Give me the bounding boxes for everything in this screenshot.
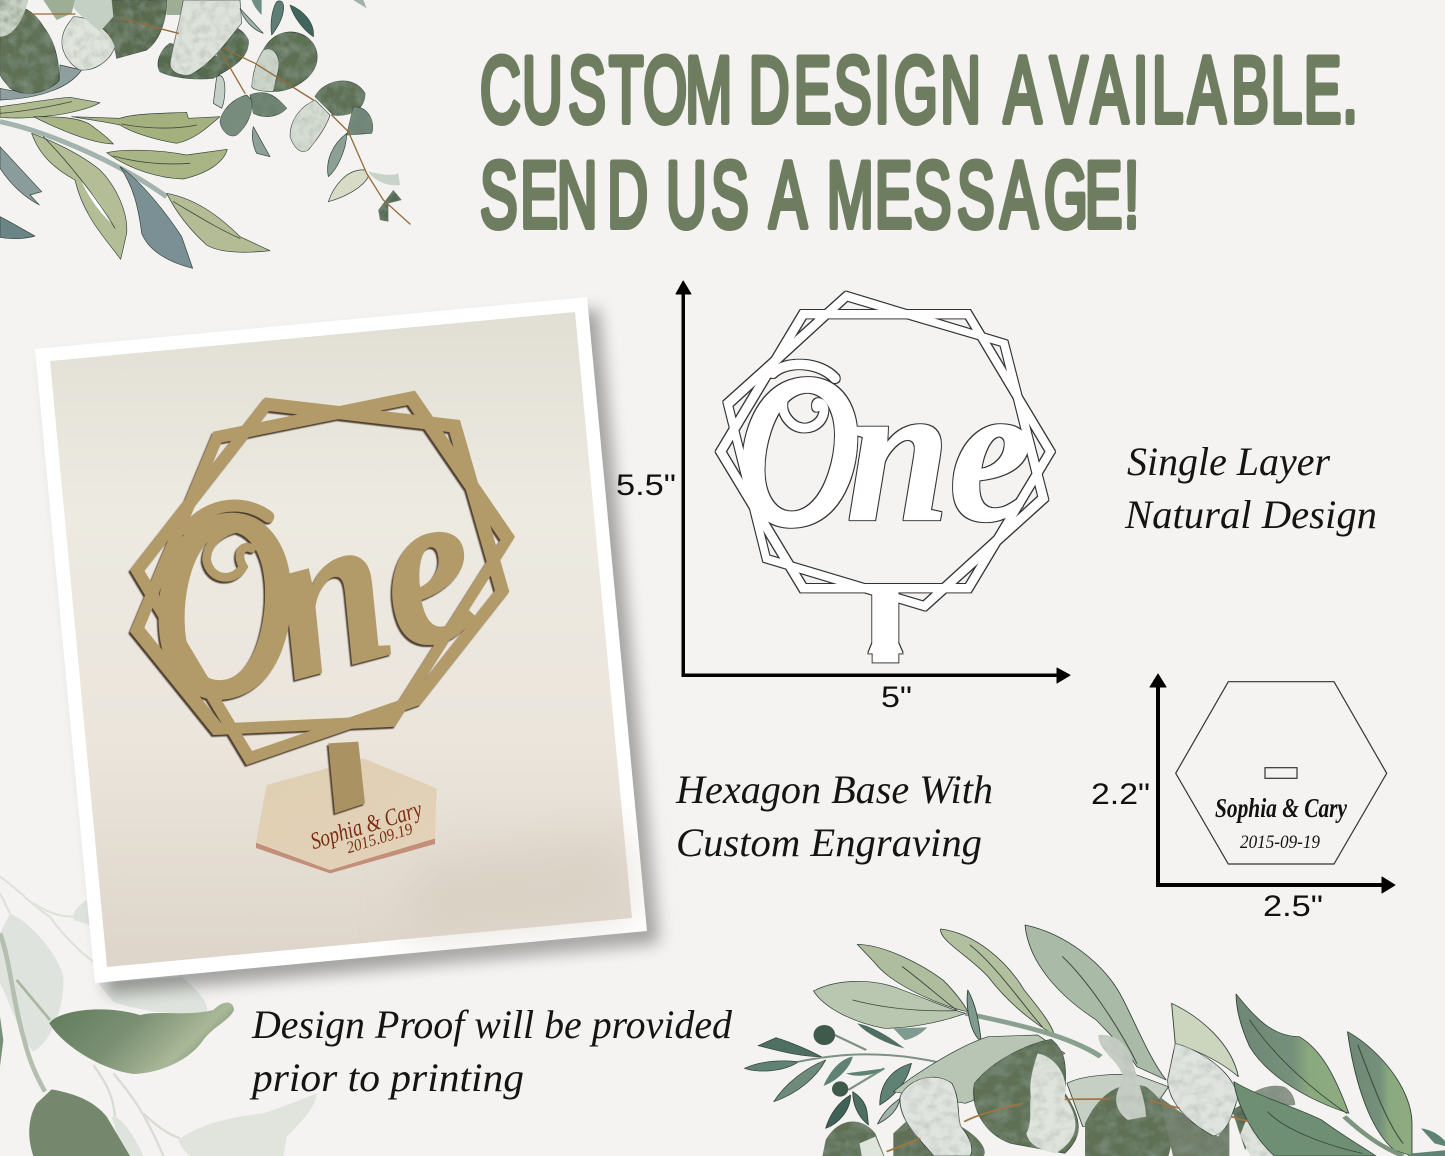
text block: design proof: Design Proof will be provided xyxy=(251,1002,733,1047)
photo: wooden hexagon base: Sophia & Cary xyxy=(307,797,425,855)
text block: single layer xyxy=(1124,439,1377,537)
diagram: topper line drawing xyxy=(716,292,1055,662)
diagram: hexagon base with engraving: Sophia & Cary xyxy=(1215,793,1348,823)
chart: topper dimension axes xyxy=(676,281,1070,683)
text block: hexagon base: Hexagon Base With xyxy=(675,767,993,812)
diagram: topper line drawing: O xyxy=(737,333,858,569)
diagram: topper line drawing: ne xyxy=(847,342,1032,563)
label: base height: 2.2" xyxy=(1091,778,1150,811)
foliage: bottom-right eucalyptus garland xyxy=(745,925,1445,1156)
photo: wooden hexagon frame with lettering: O xyxy=(138,452,306,755)
foliage: bottom-left faded leaves xyxy=(0,877,317,1156)
text block: hexagon base: Custom Engraving xyxy=(676,820,982,865)
text block: design proof xyxy=(249,1002,733,1100)
photo: wooden hexagon base: 2015.09.19 xyxy=(344,819,415,857)
label: topper width: 5" xyxy=(881,681,912,714)
foliage: top-left eucalyptus and olive branch xyxy=(0,0,410,268)
title xyxy=(480,38,1358,248)
text block: single layer: Natural Design xyxy=(1124,492,1377,537)
label: base width: 2.5" xyxy=(1263,890,1323,923)
diagram: hexagon base with engraving: 2015-09-19 xyxy=(1240,832,1320,853)
diagram: hexagon base with engraving xyxy=(1176,682,1387,864)
photo: wooden hexagon frame with lettering: ne xyxy=(240,436,501,727)
label: topper height: 5.5" xyxy=(616,469,676,502)
text block: single layer: Single Layer xyxy=(1127,439,1330,484)
panel: photo of wooden table number xyxy=(35,297,659,995)
title: SEND US A MESSAGE! xyxy=(480,143,1139,248)
text block: design proof: prior to printing xyxy=(249,1055,524,1100)
photo: wooden hexagon frame with lettering xyxy=(130,391,515,813)
chart: base dimension axes xyxy=(1150,674,1395,893)
title: CUSTOM DESIGN AVAILABLE. xyxy=(480,38,1358,143)
text block: hexagon base xyxy=(675,767,993,865)
photo: wooden hexagon base xyxy=(256,758,437,873)
